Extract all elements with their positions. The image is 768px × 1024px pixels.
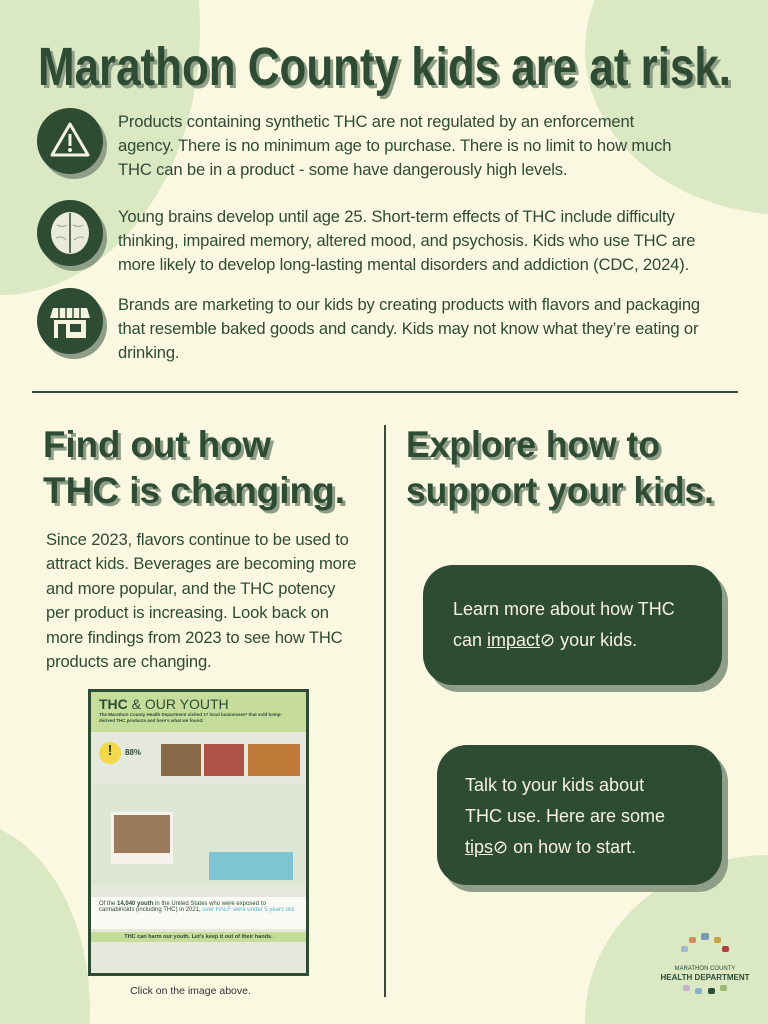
image card: THC & our youth — [88, 689, 309, 976]
icon: store — [37, 288, 103, 354]
button: learn more: can impact⊘ your kids. — [453, 630, 637, 650]
text: regulation: THC can be in a product - some have dangerously high levels. — [118, 160, 567, 179]
text: regulation: agency. There is no minimum age to purchase. There is no limit to how much — [118, 136, 671, 155]
button: talk: tips⊘ on how to start. — [465, 837, 636, 857]
text: changing — [46, 530, 356, 671]
caption: Click on the image above. — [130, 985, 251, 997]
logo: HEALTH DEPARTMENT — [660, 973, 750, 982]
heading: explore: support your kids. — [409, 473, 717, 514]
text: changing: attract kids. Beverages are becoming more — [46, 554, 356, 573]
image card: THC & our youth: 88% — [125, 748, 141, 757]
icon: brain — [37, 200, 103, 266]
button: talk: Talk to your kids about — [465, 775, 644, 795]
text: marketing: Brands are marketing to our kids by creating products with flavors and packaging — [118, 295, 700, 314]
image card: THC & our youth: The Marathon County Health Department visited 17 local businesses* that sold hemp-derived THC products and here's what we found: — [99, 712, 282, 723]
button: learn more: Learn more about how THC — [453, 599, 675, 619]
text: marketing — [118, 295, 700, 362]
image card: THC & our youth: ! — [108, 742, 112, 759]
heading: find out: THC is changing. — [43, 470, 345, 511]
heading: explore: support your kids. — [406, 470, 714, 511]
heading: explore — [406, 424, 717, 514]
text: brains — [118, 207, 695, 274]
button: learn more — [423, 565, 722, 685]
text: regulation — [118, 112, 671, 179]
text: brains: thinking, impaired memory, altered mood, and psychosis. Kids who use THC are — [118, 231, 695, 250]
text: brains: more likely to develop long-lasting mental disorders and addiction (CDC, 2024). — [118, 255, 689, 274]
text: changing: products are changing. — [46, 652, 212, 671]
text: changing: and more popular, and the THC potency — [46, 579, 335, 598]
heading: find out — [43, 424, 348, 514]
image card: THC & our youth: THC & OUR YOUTH — [99, 696, 229, 712]
text: marketing: that resemble baked goods and candy. Kids may not know what they’re eating or — [118, 319, 698, 338]
image card: THC & our youth: THC can harm our youth. Let's keep it out of their hands. — [124, 934, 273, 940]
text: changing: more findings from 2023 to see how THC — [46, 628, 343, 647]
heading: explore: Explore how to — [409, 427, 663, 468]
text: changing: Since 2023, flavors continue to be used to — [46, 530, 349, 549]
text: changing: per product is increasing. Look back on — [46, 603, 329, 622]
heading: find out: Find out how — [43, 424, 271, 465]
heading: find out: Find out how — [46, 427, 274, 468]
logo — [660, 933, 750, 994]
text: marketing: drinking. — [118, 343, 179, 362]
heading: find out: THC is changing. — [46, 473, 348, 514]
button: talk — [437, 745, 722, 885]
image card: THC & our youth: Of the 14,040 youth in the United States who were exposed to cannabinoids (including THC) in 2021, over HALF were under 5 years old. — [99, 901, 295, 913]
text: regulation: Products containing synthetic THC are not regulated by an enforcement — [118, 112, 634, 131]
button: talk: THC use. Here are some — [465, 806, 665, 826]
heading: explore: Explore how to — [406, 424, 660, 465]
text: brains: Young brains develop until age 25. Short-term effects of THC include difficulty — [118, 207, 675, 226]
logo: MARATHON COUNTY — [675, 966, 735, 972]
icon: warning — [37, 108, 103, 174]
